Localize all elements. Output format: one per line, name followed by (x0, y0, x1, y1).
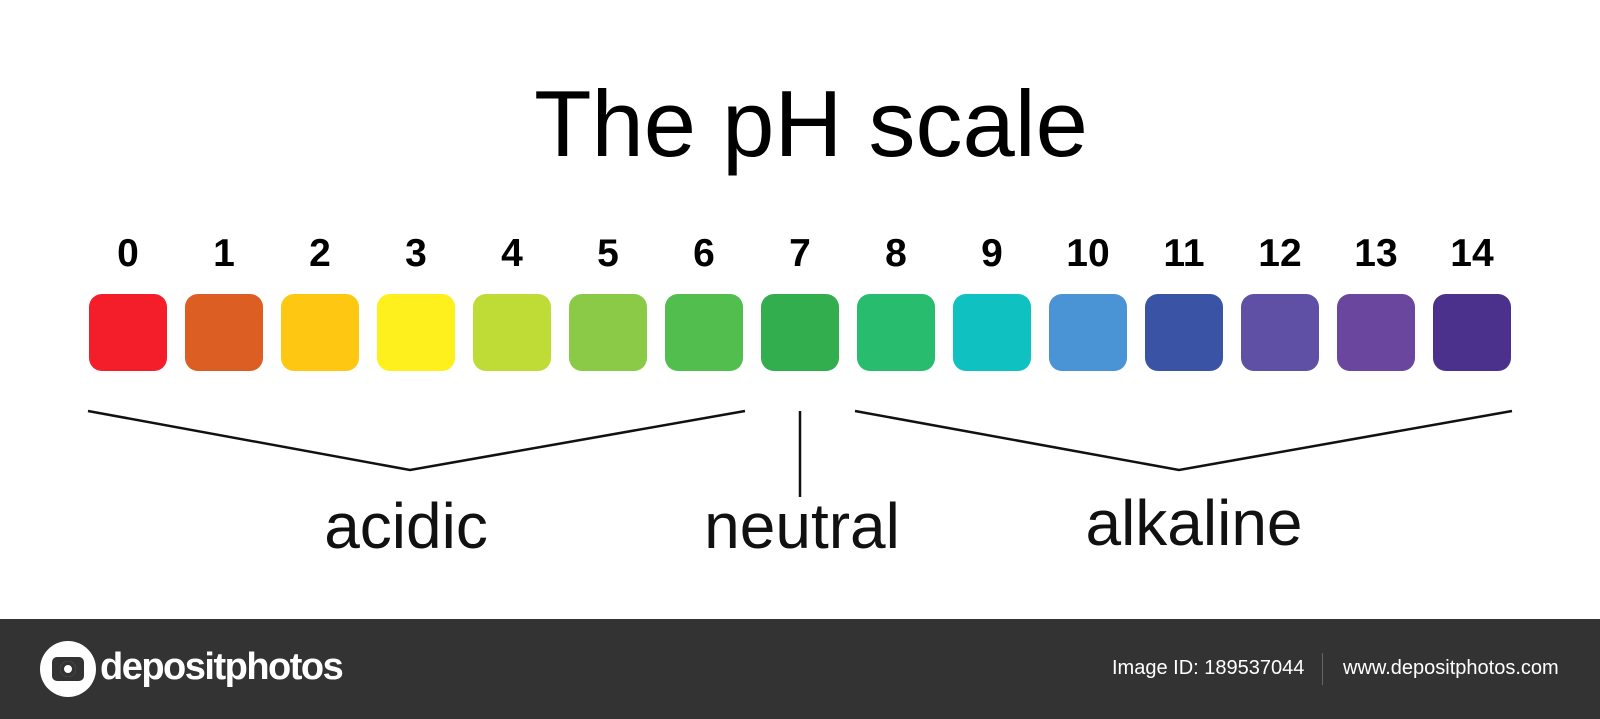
line: neutral (799, 411, 801, 497)
number labels: 3 (405, 232, 427, 275)
bracket: alkaline (855, 411, 1512, 470)
number labels: 2 (309, 232, 331, 275)
number labels: 13 (1354, 232, 1398, 275)
number labels: 4 (501, 232, 523, 275)
bracket: acidic (88, 411, 745, 470)
number labels: 8 (885, 232, 907, 275)
title: The pH scale (534, 71, 1088, 176)
number labels: 10 (1066, 232, 1110, 275)
number labels: 1 (213, 232, 235, 275)
color swatches (89, 294, 1511, 371)
image id: Image ID: 189537044 (1112, 657, 1304, 679)
number labels: 5 (597, 232, 619, 275)
number labels (117, 232, 1494, 275)
number labels: 7 (789, 232, 811, 275)
number labels: 14 (1450, 232, 1494, 275)
footer bar (0, 619, 1600, 719)
icon: camera logo (40, 641, 96, 697)
number labels: 0 (117, 232, 139, 275)
website: www.depositphotos.com (1343, 657, 1559, 679)
number labels: 9 (981, 232, 1003, 275)
label: neutral: neutral (704, 490, 900, 562)
label: alkaline: alkaline (1085, 487, 1303, 559)
label: acidic: acidic (324, 490, 488, 562)
number labels: 12 (1258, 232, 1302, 275)
brand text: depositphotos (100, 646, 342, 688)
number labels: 6 (693, 232, 715, 275)
number labels: 11 (1163, 232, 1205, 275)
